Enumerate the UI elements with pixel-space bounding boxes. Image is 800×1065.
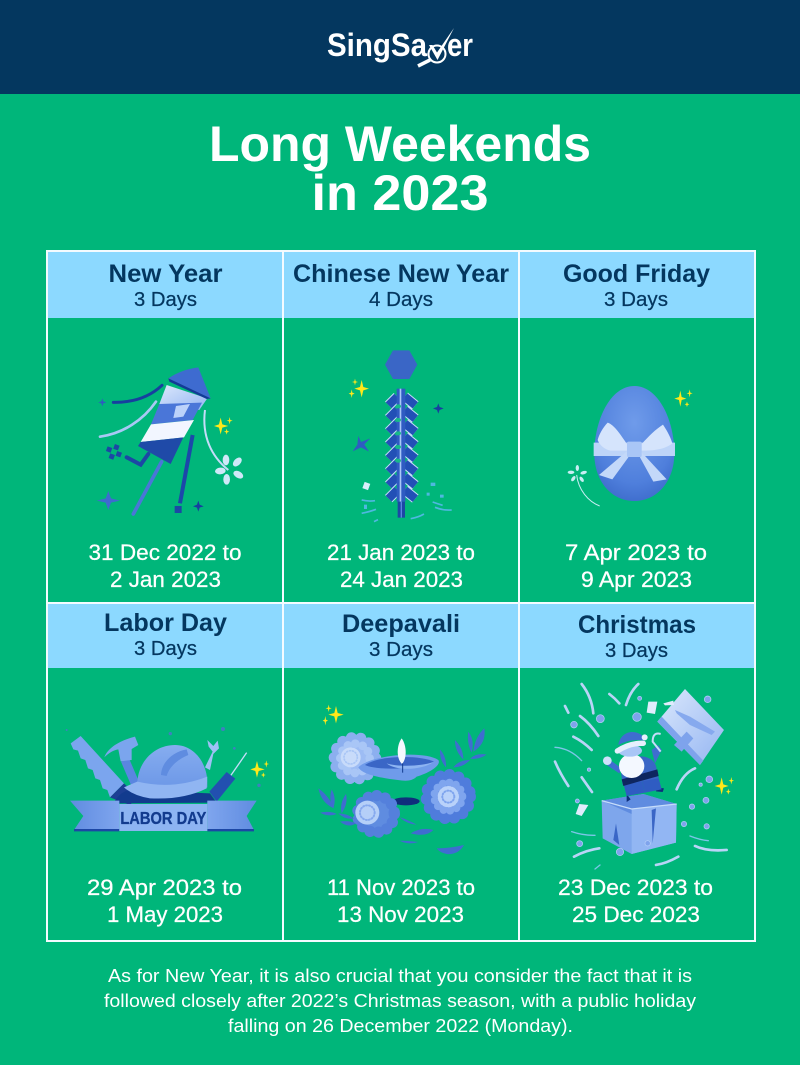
title: [209, 116, 591, 221]
panel: Deepavali: 13 Nov 2023: [337, 902, 464, 927]
footnote: followed closely after 2022’s Christmas season, with a public holiday: [104, 991, 696, 1011]
panel: Chinese New Year: [293, 260, 509, 592]
icon: easter egg with bow: [568, 386, 693, 506]
icon: hard hat, tools and banner: LABOR DAY: [120, 808, 207, 828]
table header bands: [47, 252, 755, 668]
panel: Deepavali: [318, 610, 487, 927]
panel: Labor Day: Labor Day: [104, 609, 227, 637]
logo: SingSaver: SingSa: [327, 27, 427, 63]
panel: New Year: [88, 260, 245, 592]
panel: Christmas: 3 Days: [605, 639, 668, 662]
panel: Good Friday: 9 Apr 2023: [581, 567, 692, 592]
panel: Labor Day: 29 Apr 2023 to: [87, 875, 242, 900]
logo: SingSaver: er: [447, 27, 473, 63]
panel: Labor Day: [66, 609, 269, 927]
panel: Deepavali: 3 Days: [369, 638, 433, 661]
panel: Labor Day: 1 May 2023: [107, 902, 223, 927]
panel: Chinese New Year: 4 Days: [369, 288, 433, 311]
flower: top left: [334, 738, 376, 779]
panel: Deepavali: Deepavali: [342, 610, 460, 638]
header bar with logo: [0, 0, 800, 94]
title: in 2023: [312, 165, 488, 221]
panel: Good Friday: 7 Apr 2023 to: [565, 540, 707, 565]
panel: New Year: New Year: [108, 260, 223, 288]
logo: SingSaver: [327, 27, 473, 66]
panel: Good Friday: 3 Days: [604, 288, 668, 311]
flower: bottom left: [355, 796, 394, 832]
panel: New Year: 2 Jan 2023: [110, 567, 221, 592]
panel: Chinese New Year: Chinese New Year: [293, 260, 509, 288]
panel: Christmas: Christmas: [578, 611, 696, 639]
panel: Chinese New Year: 21 Jan 2023 to: [327, 540, 475, 565]
panel: New Year: 31 Dec 2022 to: [88, 540, 242, 565]
icon: rocket firework: [97, 367, 245, 514]
title: Long Weekends: [209, 116, 591, 172]
panel: Chinese New Year: 24 Jan 2023: [340, 567, 463, 592]
panel: Christmas: [555, 611, 734, 927]
icon: hard hat, tools and banner: [66, 727, 269, 831]
panel: Deepavali: 11 Nov 2023 to: [327, 875, 475, 900]
footnote: As for New Year, it is also crucial that you consider the fact that it is: [108, 966, 692, 986]
holiday table: [47, 251, 755, 941]
footnote: [104, 966, 696, 1036]
panel: Christmas: 23 Dec 2023 to: [558, 875, 713, 900]
flower: right: [427, 775, 470, 818]
icon: diya lamp and flowers: [318, 705, 487, 854]
footnote: falling on 26 December 2022 (Monday).: [228, 1016, 573, 1036]
panel: Good Friday: [563, 260, 710, 592]
panel: Christmas: 25 Dec 2023: [572, 902, 700, 927]
panel: Labor Day: 3 Days: [134, 637, 197, 660]
icon: Santa and gift box: [555, 684, 734, 869]
icon: firecrackers: [349, 350, 452, 522]
panel: Good Friday: Good Friday: [563, 260, 710, 288]
panel: New Year: 3 Days: [134, 288, 197, 311]
